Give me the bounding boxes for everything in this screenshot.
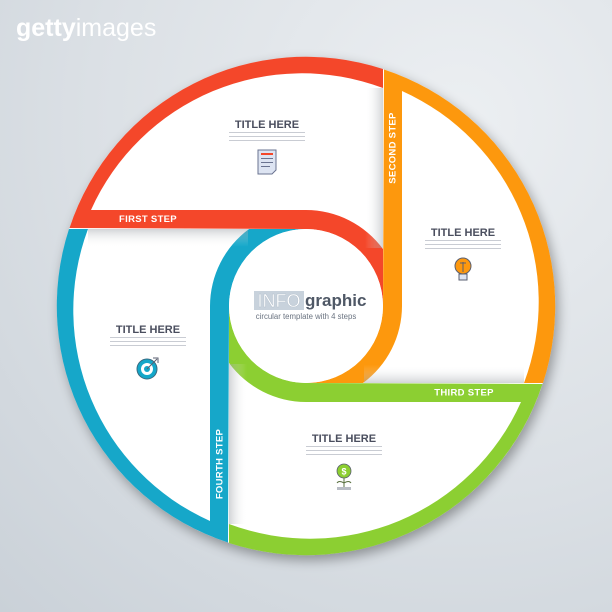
text block: panel 1: TITLE HERE bbox=[235, 119, 299, 131]
text block: panel 3: TITLE HERE bbox=[312, 433, 376, 445]
center title: graphic bbox=[305, 291, 366, 310]
step labels bbox=[119, 112, 494, 499]
infographic circle bbox=[57, 57, 555, 555]
text block: panel 2 bbox=[425, 227, 501, 249]
label: second step: SECOND STEP bbox=[388, 112, 398, 184]
icon: money plant: $ bbox=[341, 466, 347, 476]
center title bbox=[254, 291, 366, 321]
center title: INFO bbox=[258, 291, 300, 311]
watermark: gettyimages bbox=[16, 14, 156, 42]
text block: panel 4 bbox=[110, 324, 186, 346]
text block: panel 2: TITLE HERE bbox=[431, 227, 495, 239]
icon: light bulb bbox=[455, 258, 471, 280]
label: fourth step: FOURTH STEP bbox=[214, 428, 226, 499]
segment: third step (green) bbox=[229, 306, 542, 555]
center circle bbox=[229, 229, 383, 383]
center title: circular template with 4 steps bbox=[256, 312, 356, 321]
segment: fourth step (blue) bbox=[57, 229, 306, 542]
segment: first step (red) bbox=[70, 57, 383, 306]
label: third step: THIRD STEP bbox=[434, 388, 494, 398]
text block: panel 3 bbox=[306, 433, 382, 455]
label: first step: FIRST STEP bbox=[119, 214, 177, 225]
text block: panel 1 bbox=[229, 119, 305, 141]
segment: second step (orange) bbox=[306, 70, 555, 383]
text block: panel 4: TITLE HERE bbox=[116, 324, 180, 336]
icon: target bbox=[137, 358, 158, 379]
icon: money plant bbox=[337, 464, 351, 490]
icon: document bbox=[258, 150, 276, 174]
